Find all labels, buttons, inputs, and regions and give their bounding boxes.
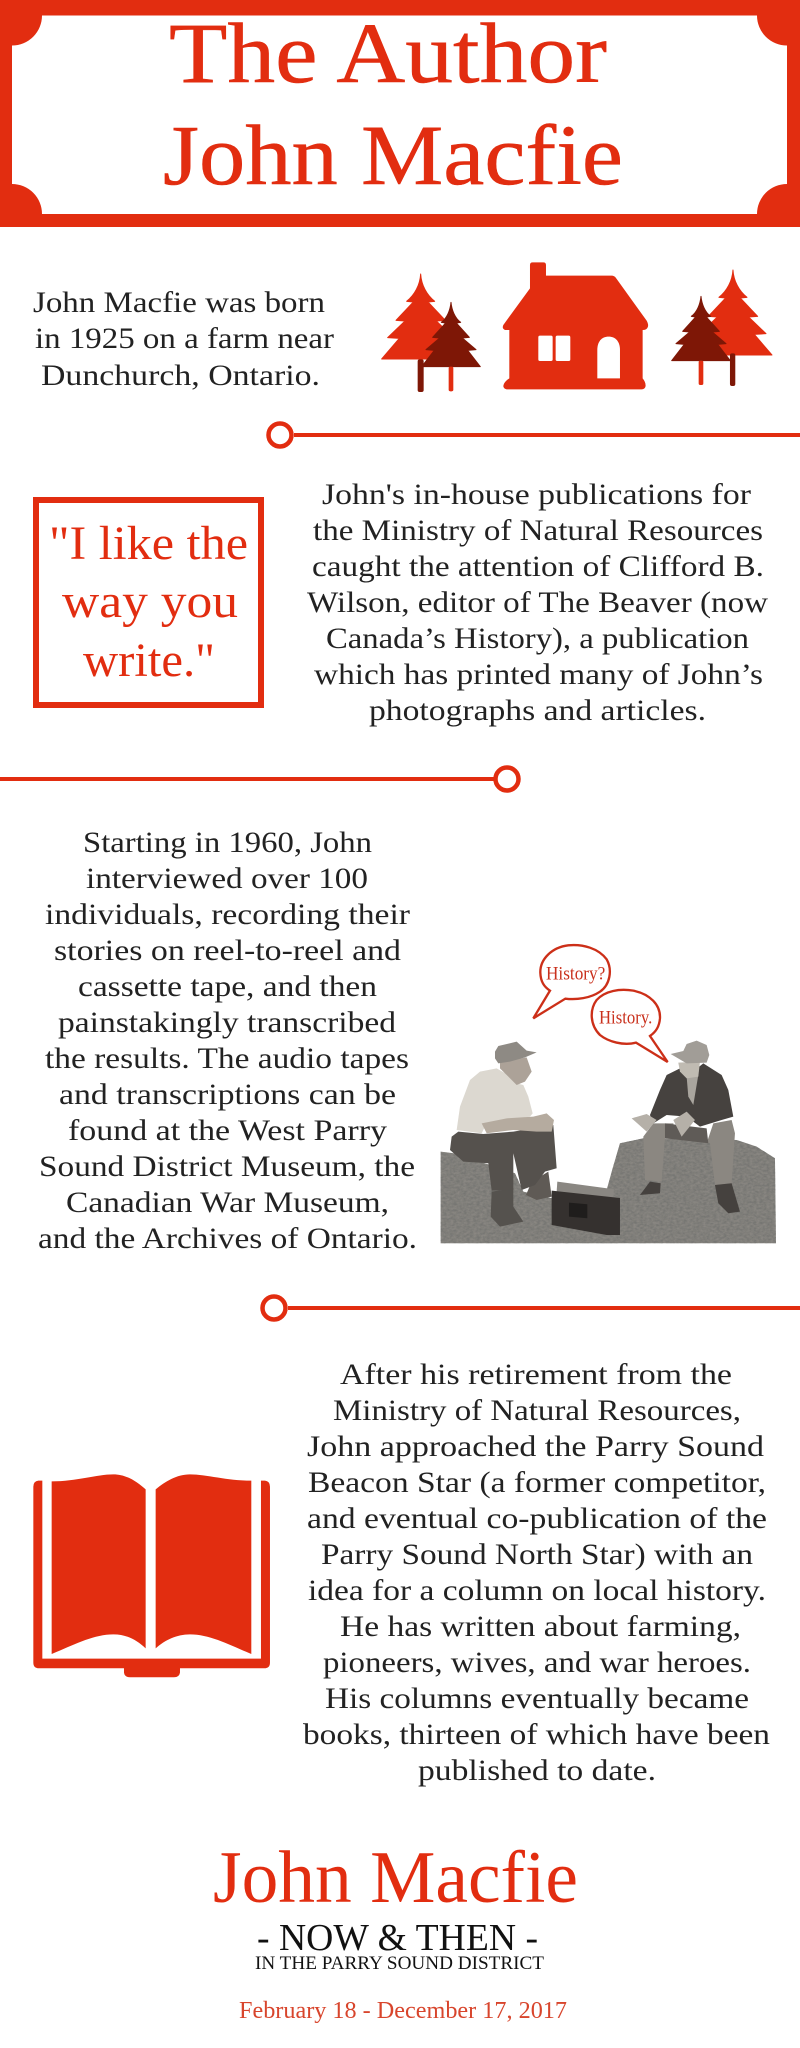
text: birth: in 1925 on a farm near (35, 323, 334, 355)
text: interviews: and the Archives of Ontario. (38, 1223, 417, 1255)
photo: two men on hay bales with speech bubbles (441, 945, 776, 1243)
icon: right dark tree (672, 296, 730, 385)
footer location: IN THE PARRY SOUND DISTRICT (255, 1953, 544, 1974)
text: columns and books: pioneers, wives, and war heroes. (323, 1647, 751, 1679)
text: publications: John's in-house publications for (322, 479, 751, 511)
icon: left trees (382, 274, 480, 392)
footer name: John Macfie (213, 1837, 578, 1919)
text: columns and books: idea for a column on local history. (308, 1575, 766, 1607)
icon: open book (33, 1474, 270, 1677)
hay bales (441, 1138, 776, 1243)
text: publications: Wilson, editor of The Beaver (now (307, 587, 769, 619)
quote text (49, 517, 248, 687)
footer subtitle: - NOW & THEN - (257, 1917, 538, 1959)
text: birth (33, 287, 334, 392)
text: interviews: cassette tape, and then (78, 971, 377, 1003)
text: interviews: the results. The audio tapes (45, 1043, 409, 1075)
text: interviews (38, 827, 417, 1255)
title banner (0, 0, 800, 227)
text: interviews: interviewed over 100 (86, 863, 368, 895)
text: columns and books (303, 1359, 770, 1787)
icon: right bright tree (694, 270, 772, 386)
footer dates: February 18 - December 17, 2017 (239, 1998, 567, 2024)
text: interviews: found at the West Parry (68, 1115, 387, 1147)
footer: exhibit logo (213, 1837, 578, 2024)
text: publications: photographs and articles. (369, 695, 706, 727)
speech bubble: History. (592, 990, 668, 1062)
cassette radio (552, 1182, 620, 1235)
text: columns and books: Beacon Star (a former competitor, (308, 1467, 766, 1499)
text: birth: Dunchurch, Ontario. (41, 360, 320, 392)
quote text: "I like the (49, 517, 248, 570)
text: publications: which has printed many of John’s (314, 659, 763, 691)
text: publications: the Ministry of Natural Resources (313, 515, 763, 547)
divider 3 (262, 1296, 800, 1320)
quote text: way you (62, 575, 238, 628)
speech bubble: History.: History. (599, 1007, 652, 1028)
text: columns and books: published to date. (418, 1755, 656, 1787)
text: columns and books: After his retirement from the (340, 1359, 732, 1391)
text: columns and books: books, thirteen of which have been (303, 1719, 770, 1751)
divider 1 (268, 424, 800, 446)
divider 2 (0, 768, 518, 790)
text: birth: John Macfie was born (33, 287, 325, 319)
text: columns and books: John approached the Parry Sound (307, 1431, 764, 1463)
text: columns and books: His columns eventually became (325, 1683, 749, 1715)
speech bubble: History? (533, 945, 610, 1018)
text: columns and books: Ministry of Natural Resources, (333, 1395, 741, 1427)
right man (632, 1041, 740, 1213)
text: interviews: individuals, recording their (45, 899, 410, 931)
icon: farmhouse and trees (382, 262, 772, 392)
speech bubble: History?: History? (546, 963, 605, 984)
text: interviews: Canadian War Museum, (66, 1187, 389, 1219)
text: interviews: Starting in 1960, John (83, 827, 372, 859)
text: columns and books: He has written about farming, (340, 1611, 741, 1643)
text: interviews: and transcriptions can be (59, 1079, 396, 1111)
text: publications: Canada’s History), a publication (326, 623, 749, 655)
text: publications: caught the attention of Clifford B. (312, 551, 764, 583)
text: interviews: painstakingly transcribed (58, 1007, 396, 1039)
left man (450, 1042, 557, 1227)
title text (163, 5, 623, 203)
title text: John Macfie (163, 107, 623, 203)
quote text: write." (83, 634, 215, 687)
text: columns and books: and eventual co-publication of the (307, 1503, 767, 1535)
title text: The Author (169, 5, 607, 101)
text: columns and books: Parry Sound North Star) with an (321, 1539, 753, 1571)
text: publications (307, 479, 769, 727)
text: interviews: Sound District Museum, the (39, 1151, 415, 1183)
icon: house (503, 262, 648, 389)
quote box (36, 500, 261, 705)
text: interviews: stories on reel-to-reel and (54, 935, 401, 967)
